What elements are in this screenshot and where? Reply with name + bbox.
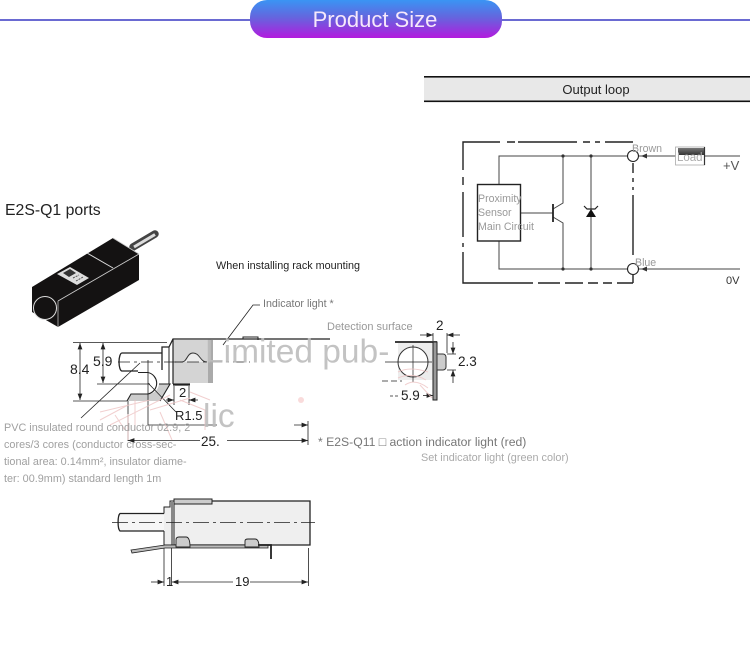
leader to R1.5: [148, 383, 176, 412]
zener diode: [584, 206, 598, 217]
brown terminal: [628, 150, 638, 162]
watermark text: [203, 334, 389, 435]
end view dimension values: 2: [436, 318, 444, 333]
circuit labels: +V: [723, 158, 740, 173]
load box: [676, 147, 704, 165]
diagram: rack mounting side view: [73, 305, 330, 445]
text block: cable note: ter: 00.9mm) standard length 1m: [4, 473, 161, 485]
header: product size banner: [0, 0, 750, 38]
text block: cable note: PVC insulated round conductor 02.9, 2: [4, 422, 190, 434]
cable: [119, 353, 162, 371]
diagram dimension values: R1.5: [175, 408, 202, 423]
watermark stamp: [100, 369, 432, 440]
circuit labels: [478, 143, 740, 287]
note: set indicator light: Set indicator light (green color): [421, 452, 569, 464]
bottom view dimension values: 19: [235, 574, 249, 589]
end view dimension values: 2.3: [458, 354, 477, 369]
watermark text: Limited pub-: [205, 334, 389, 370]
dimension 2: [174, 386, 189, 405]
terminal arrows: [641, 154, 647, 272]
circuit wiring: [499, 156, 740, 269]
text block: cable note: [4, 422, 190, 485]
label: indicator light: Indicator light *: [263, 298, 334, 310]
note: action indicator light: * E2S-Q11 □ action indicator light (red): [318, 435, 526, 449]
text block: cable note: tional area: 0.14mm², insulator diame-: [4, 456, 187, 468]
diagram: detection surface end view: [382, 333, 460, 400]
label: detection surface: Detection surface: [327, 321, 413, 333]
end view dimension values: [401, 318, 477, 403]
diagram dimension values: 8.4: [70, 361, 90, 377]
dimension 5.9: [102, 343, 104, 383]
diagram: bottom side view: [112, 499, 315, 586]
header: product size banner: Product Size: [313, 7, 437, 32]
mounting bracket: [131, 545, 268, 553]
blue terminal: [628, 264, 638, 274]
proximity sensor main circuit box: [478, 184, 520, 241]
panel: output loop heading: [424, 76, 750, 102]
mounting bracket hook: [127, 384, 170, 401]
circuit labels: Sensor: [478, 207, 512, 219]
watermark text: lic: [203, 398, 235, 435]
circuit labels: Blue: [635, 257, 656, 269]
heading: E2S-Q1 ports: E2S-Q1 ports: [5, 202, 101, 219]
sensor dashed enclosure: [463, 142, 633, 283]
junction dots: [561, 154, 593, 271]
cable: [118, 514, 164, 531]
end view dimension values: 5.9: [401, 388, 420, 403]
diagram dimension values: [70, 353, 220, 449]
transistor base bar: [552, 204, 554, 222]
bottom view dimension values: [166, 574, 249, 589]
circuit labels: Load: [677, 152, 703, 164]
panel: output loop heading: Output loop: [562, 82, 630, 97]
diagram dimension values: 5.9: [93, 353, 113, 369]
body: [173, 340, 213, 383]
dimension 8.4: [73, 342, 167, 401]
dimension 25: [128, 360, 308, 445]
diagram dimension values: 25.: [201, 434, 220, 449]
text block: cable note: cores/3 cores (conductor cross-sec-: [4, 439, 177, 451]
diagram dimension values: 2: [179, 385, 186, 400]
bottom view dimension values: 1: [166, 574, 173, 589]
icon: sensor 3D product view: [32, 234, 155, 327]
dimension lines: [151, 548, 308, 586]
circuit labels: 0V: [726, 275, 740, 287]
circuit labels: Main Circuit: [478, 221, 534, 233]
leader to conductor: [81, 363, 140, 418]
circuit diagram: [463, 142, 740, 283]
circuit labels: Brown: [632, 143, 662, 155]
circuit labels: Proximity: [478, 193, 522, 205]
leader to indicator light: [223, 305, 260, 345]
label: rack mounting: When installing rack mounting: [216, 260, 360, 272]
